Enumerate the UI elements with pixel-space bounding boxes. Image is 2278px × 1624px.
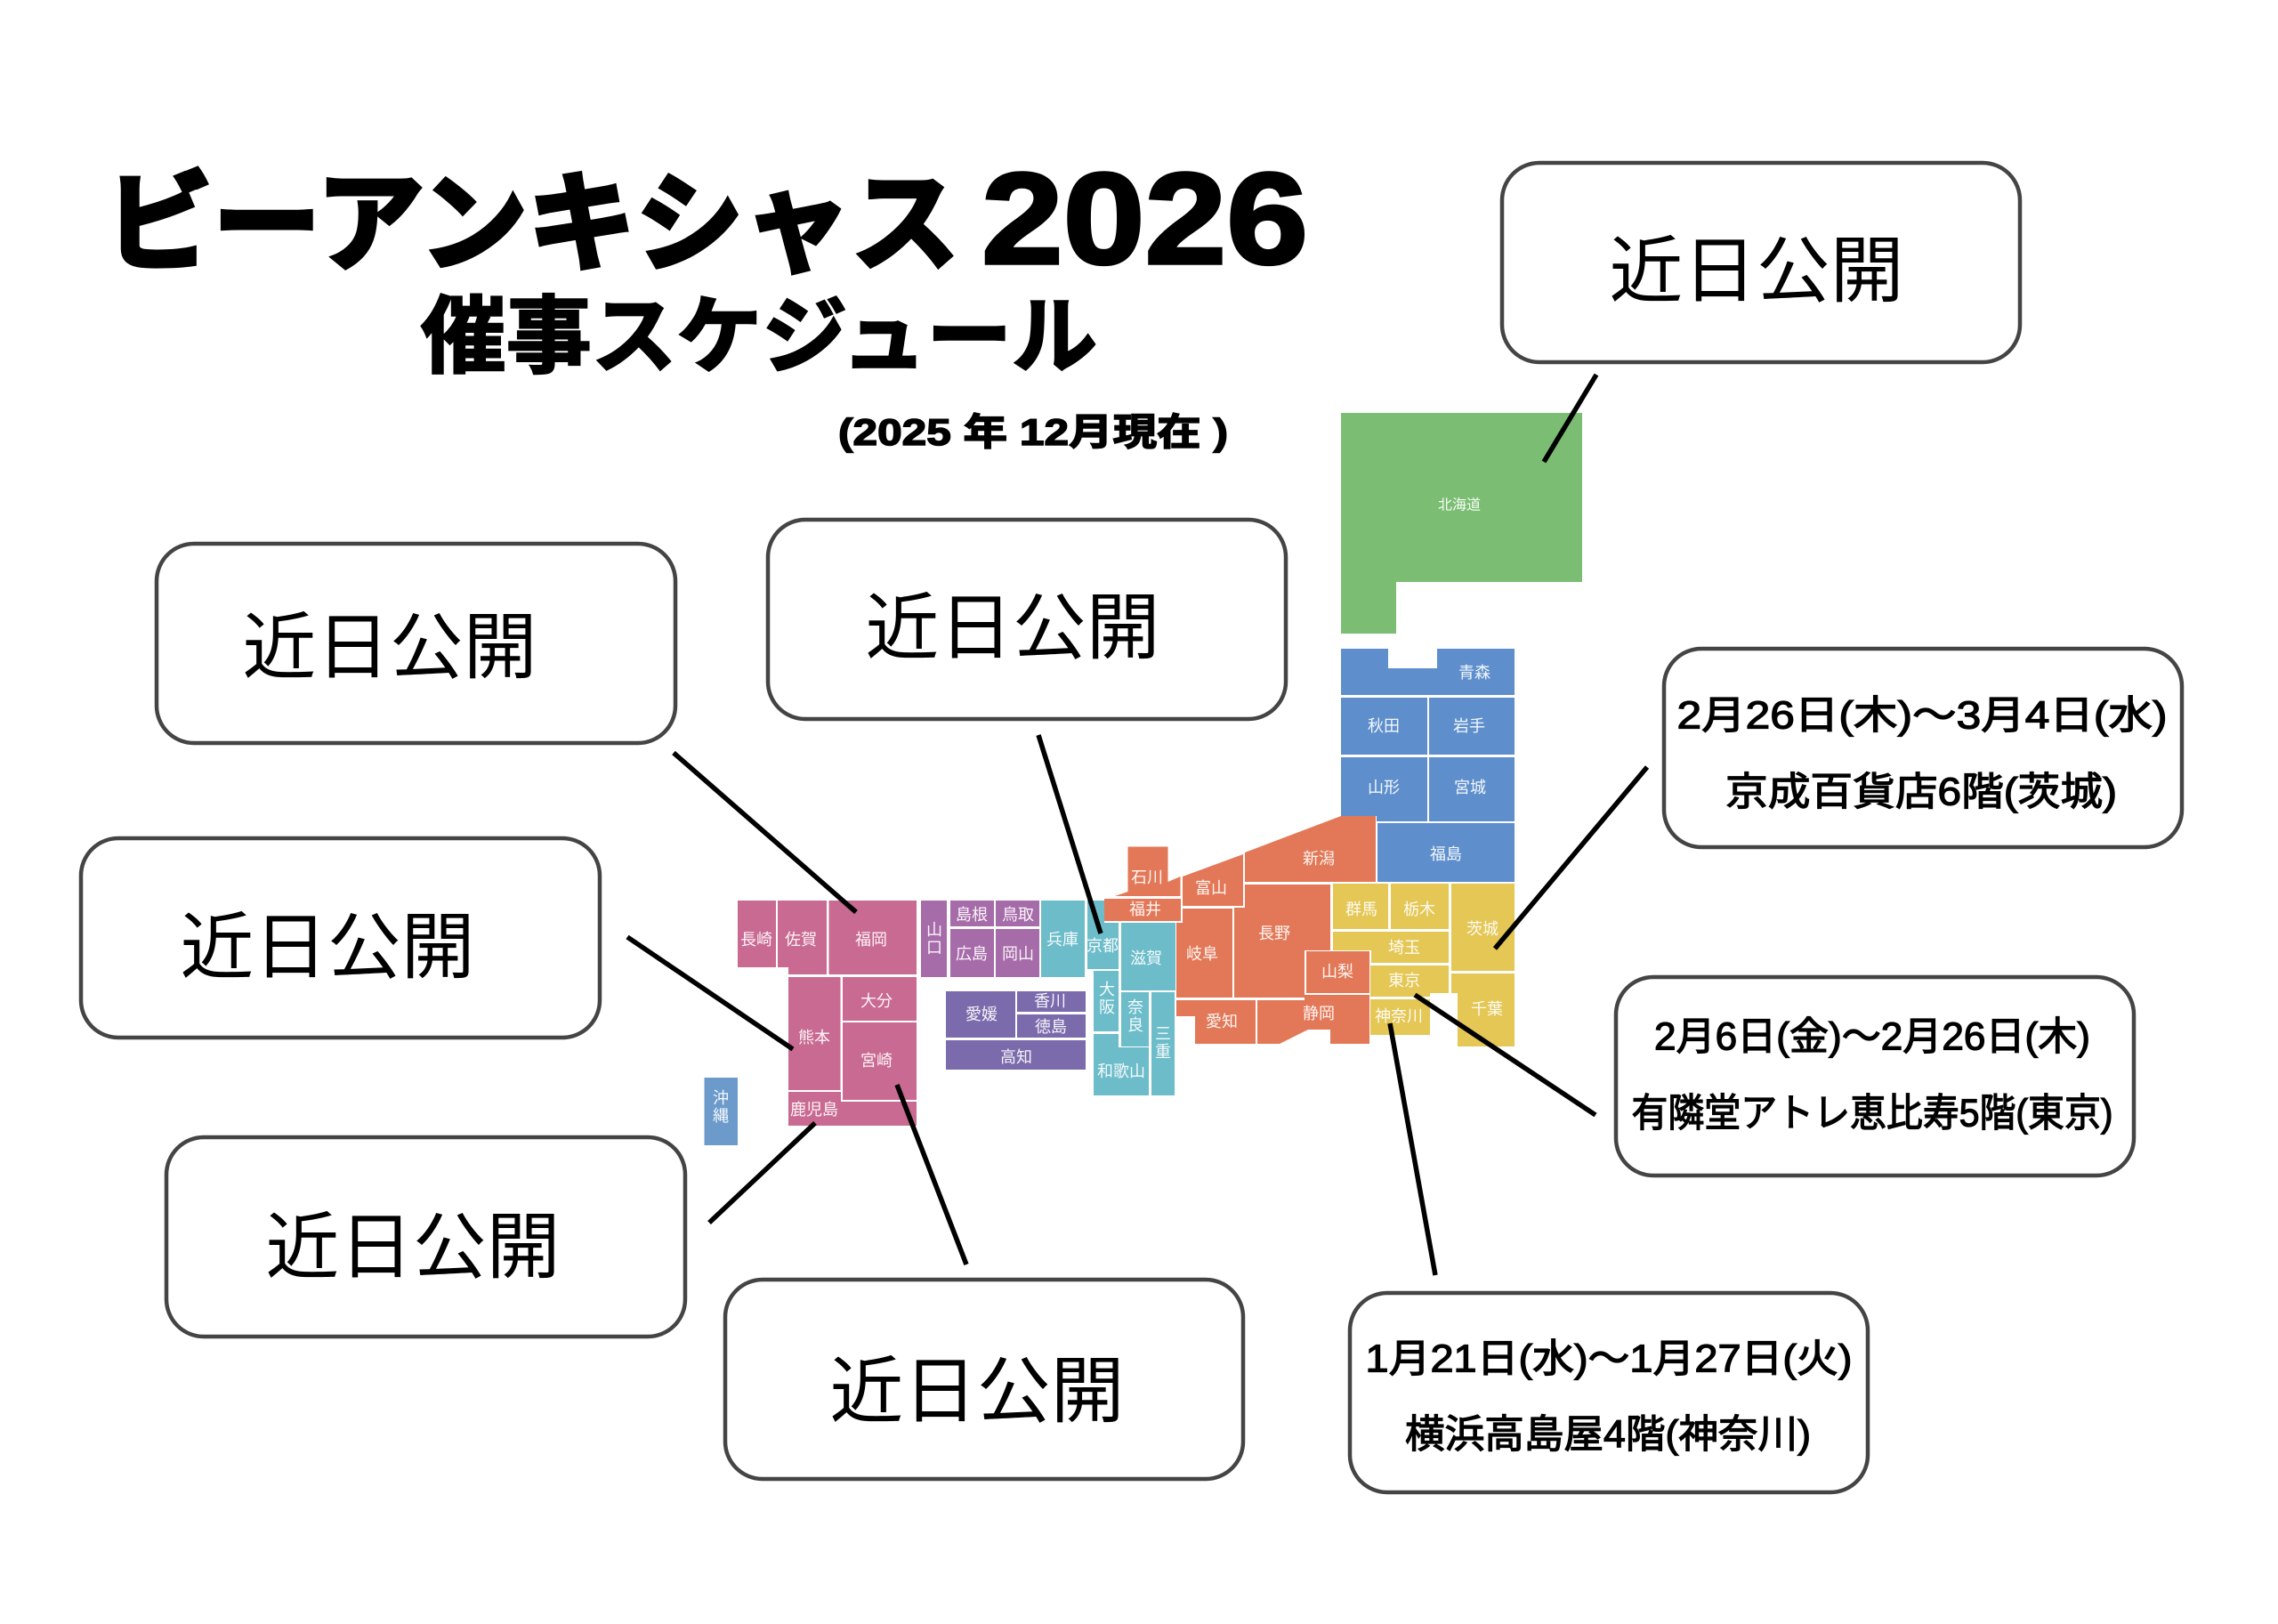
region: Kansai — [1041, 901, 1175, 1095]
Niigata — [1245, 816, 1376, 882]
Shiga: 滋賀 — [1130, 949, 1162, 967]
region: Okinawa — [705, 1078, 738, 1145]
Fukuoka — [829, 901, 917, 974]
callout: Kanagawa event: 1月21日(水)～1月27日(火) — [1365, 1337, 1853, 1381]
Saga — [778, 901, 827, 974]
Kochi — [946, 1040, 1086, 1070]
Tokyo: 東京 — [1388, 972, 1420, 990]
Saitama: 埼玉 — [1388, 939, 1420, 957]
callout: Tokyo event — [1616, 977, 2134, 1176]
Tokyo — [1370, 966, 1449, 997]
Kagawa: 香川 — [1034, 992, 1066, 1010]
arrow: Kumamoto — [627, 937, 793, 1049]
Tochigi: 栃木 — [1403, 901, 1435, 918]
Saitama — [1333, 932, 1449, 963]
Hiroshima: 広島 — [956, 945, 988, 963]
region: Shikoku — [946, 991, 1086, 1070]
Akita — [1341, 698, 1427, 755]
Toyama — [1183, 854, 1243, 906]
callout: Hokkaido — [1502, 163, 2020, 362]
Akita: 秋田 — [1368, 717, 1400, 735]
Osaka: 阪 — [1099, 998, 1115, 1016]
Saga: 佐賀 — [785, 931, 817, 949]
Shizuoka: 静岡 — [1303, 1005, 1335, 1022]
Okayama: 岡山 — [1002, 945, 1034, 963]
Toyama: 富山 — [1195, 879, 1227, 897]
Tokushima — [1017, 1014, 1086, 1038]
Hyogo — [1041, 901, 1085, 977]
Kagoshima — [788, 1092, 917, 1126]
callout: Ibaraki event: 2月26日(木)～3月4日(水) — [1676, 694, 2168, 737]
region: Hokkaido — [1341, 413, 1582, 634]
Fukushima — [1377, 823, 1515, 882]
Aichi — [1176, 1000, 1256, 1044]
Gunma: 群馬 — [1345, 901, 1377, 918]
title: ビーアンキシャス — [105, 164, 959, 285]
callout: Fukuoka: 近日公開 — [242, 607, 537, 689]
Nagano: 長野 — [1258, 925, 1290, 942]
Yamanashi: 山梨 — [1321, 963, 1353, 981]
region: Hokkaido: 北海道 — [1438, 497, 1481, 513]
Gifu: 岐阜 — [1186, 945, 1218, 963]
Yamaguchi: 口 — [926, 939, 942, 957]
region: Okinawa: 縄 — [713, 1107, 729, 1125]
Niigata: 新潟 — [1303, 850, 1335, 868]
region: Kanto — [1333, 884, 1515, 1046]
subtitle: 催事スケジュール — [421, 290, 1097, 384]
Kyoto — [1086, 901, 1119, 969]
Kyoto: 京都 — [1086, 937, 1119, 955]
arrow: Tokyo — [1415, 995, 1595, 1115]
callout: Hokkaido: 近日公開 — [1609, 231, 1904, 311]
Fukui — [1104, 899, 1181, 921]
Gifu — [1176, 909, 1232, 998]
Ehime — [946, 991, 1015, 1038]
callout: Tokyo event: 2月6日(金)～2月26日(木) — [1654, 1014, 2090, 1059]
Ishikawa: 石川 — [1131, 869, 1163, 886]
callout: Kyoto — [768, 520, 1286, 719]
callout: Tokyo event: 有隣堂アトレ恵比寿5階(東京) — [1632, 1091, 2112, 1135]
arrow: Fukuoka — [674, 753, 856, 912]
Yamagata: 山形 — [1368, 779, 1400, 796]
Mie: 重 — [1155, 1043, 1171, 1061]
callout: Kanagawa event — [1350, 1293, 1868, 1492]
Miyagi: 宮城 — [1454, 779, 1486, 796]
callout: Kagoshima: 近日公開 — [265, 1207, 561, 1289]
Ishikawa — [1115, 847, 1180, 896]
Tottori: 鳥取 — [1002, 906, 1034, 924]
Gunma — [1333, 884, 1388, 929]
Nara: 良 — [1127, 1016, 1143, 1034]
title — [105, 146, 1308, 291]
Mie — [1151, 992, 1175, 1095]
callout: Ibaraki event: 京成百貨店6階(茨城) — [1725, 771, 2117, 813]
Miyagi — [1429, 757, 1515, 821]
arrow: Kyoto — [1038, 735, 1101, 933]
region: Chubu — [1104, 816, 1376, 1044]
Wakayama — [1094, 1034, 1149, 1095]
Osaka — [1094, 971, 1119, 1031]
Ibaraki: 茨城 — [1466, 920, 1498, 938]
callout: Kagoshima — [166, 1137, 685, 1337]
Iwate: 岩手 — [1453, 717, 1485, 735]
Miyazaki — [843, 1022, 917, 1100]
map of Japan — [705, 413, 1582, 1145]
date note: (2025 年 12月現在 ) — [838, 411, 1228, 453]
Kochi: 高知 — [1000, 1048, 1032, 1066]
Nagasaki — [738, 901, 776, 967]
arrow: Hokkaido — [1544, 375, 1596, 462]
region: Chugoku — [921, 901, 1039, 977]
Aichi: 愛知 — [1206, 1013, 1238, 1030]
Kumamoto — [788, 977, 840, 1090]
Nagasaki: 長崎 — [740, 931, 772, 949]
callout: Miyazaki — [725, 1280, 1243, 1479]
Tochigi — [1391, 884, 1449, 929]
callout: Ibaraki event — [1664, 649, 2182, 847]
Shiga — [1121, 923, 1175, 990]
Kanagawa — [1370, 999, 1430, 1035]
Yamanashi — [1306, 951, 1369, 993]
Fukui: 福井 — [1129, 901, 1161, 918]
region: Kyushu — [738, 901, 917, 1126]
Yamaguchi: 山 — [926, 921, 942, 939]
arrow: Kagoshima — [709, 1123, 815, 1223]
Iwate — [1429, 698, 1515, 755]
title: 2026 — [981, 146, 1308, 291]
Miyazaki: 宮崎 — [860, 1052, 893, 1070]
region: Tohoku — [1341, 649, 1515, 882]
Kumamoto: 熊本 — [798, 1029, 830, 1046]
callout: Kanagawa event: 横浜高島屋4階(神奈川) — [1405, 1413, 1811, 1456]
Oita — [843, 977, 917, 1021]
Nara — [1121, 992, 1149, 1046]
callout: Kumamoto — [81, 838, 600, 1038]
Wakayama: 和歌山 — [1097, 1062, 1145, 1080]
Fukuoka: 福岡 — [855, 931, 887, 949]
callout: Miyazaki: 近日公開 — [829, 1351, 1125, 1433]
Aomori — [1341, 649, 1515, 695]
Chiba — [1451, 974, 1515, 1046]
Ibaraki — [1451, 884, 1515, 971]
Osaka: 大 — [1099, 981, 1115, 998]
Tokushima: 徳島 — [1035, 1018, 1067, 1036]
Yamagata — [1341, 757, 1427, 821]
Ehime: 愛媛 — [965, 1006, 998, 1023]
Oita: 大分 — [860, 992, 893, 1010]
Hyogo: 兵庫 — [1046, 931, 1078, 949]
Chiba: 千葉 — [1471, 1000, 1503, 1018]
Fukushima: 福島 — [1430, 845, 1462, 863]
Kanagawa: 神奈川 — [1375, 1007, 1423, 1025]
Nara: 奈 — [1127, 998, 1143, 1016]
Mie: 三 — [1155, 1025, 1171, 1043]
region: Okinawa: 沖 — [713, 1089, 729, 1107]
arrow: Miyazaki — [897, 1085, 966, 1264]
Shimane: 島根 — [956, 906, 988, 924]
callout: Fukuoka — [157, 544, 675, 743]
Shizuoka — [1257, 995, 1369, 1044]
arrow: Ibaraki — [1495, 767, 1647, 949]
Kagawa — [1017, 991, 1086, 1012]
Kagoshima: 鹿児島 — [790, 1101, 838, 1119]
Yamaguchi — [921, 901, 947, 977]
Aomori: 青森 — [1458, 664, 1490, 682]
callout: Kumamoto: 近日公開 — [180, 908, 475, 988]
callout: Kyoto: 近日公開 — [865, 587, 1160, 669]
arrow: Kanagawa — [1390, 1023, 1435, 1275]
Nagano — [1234, 885, 1330, 998]
